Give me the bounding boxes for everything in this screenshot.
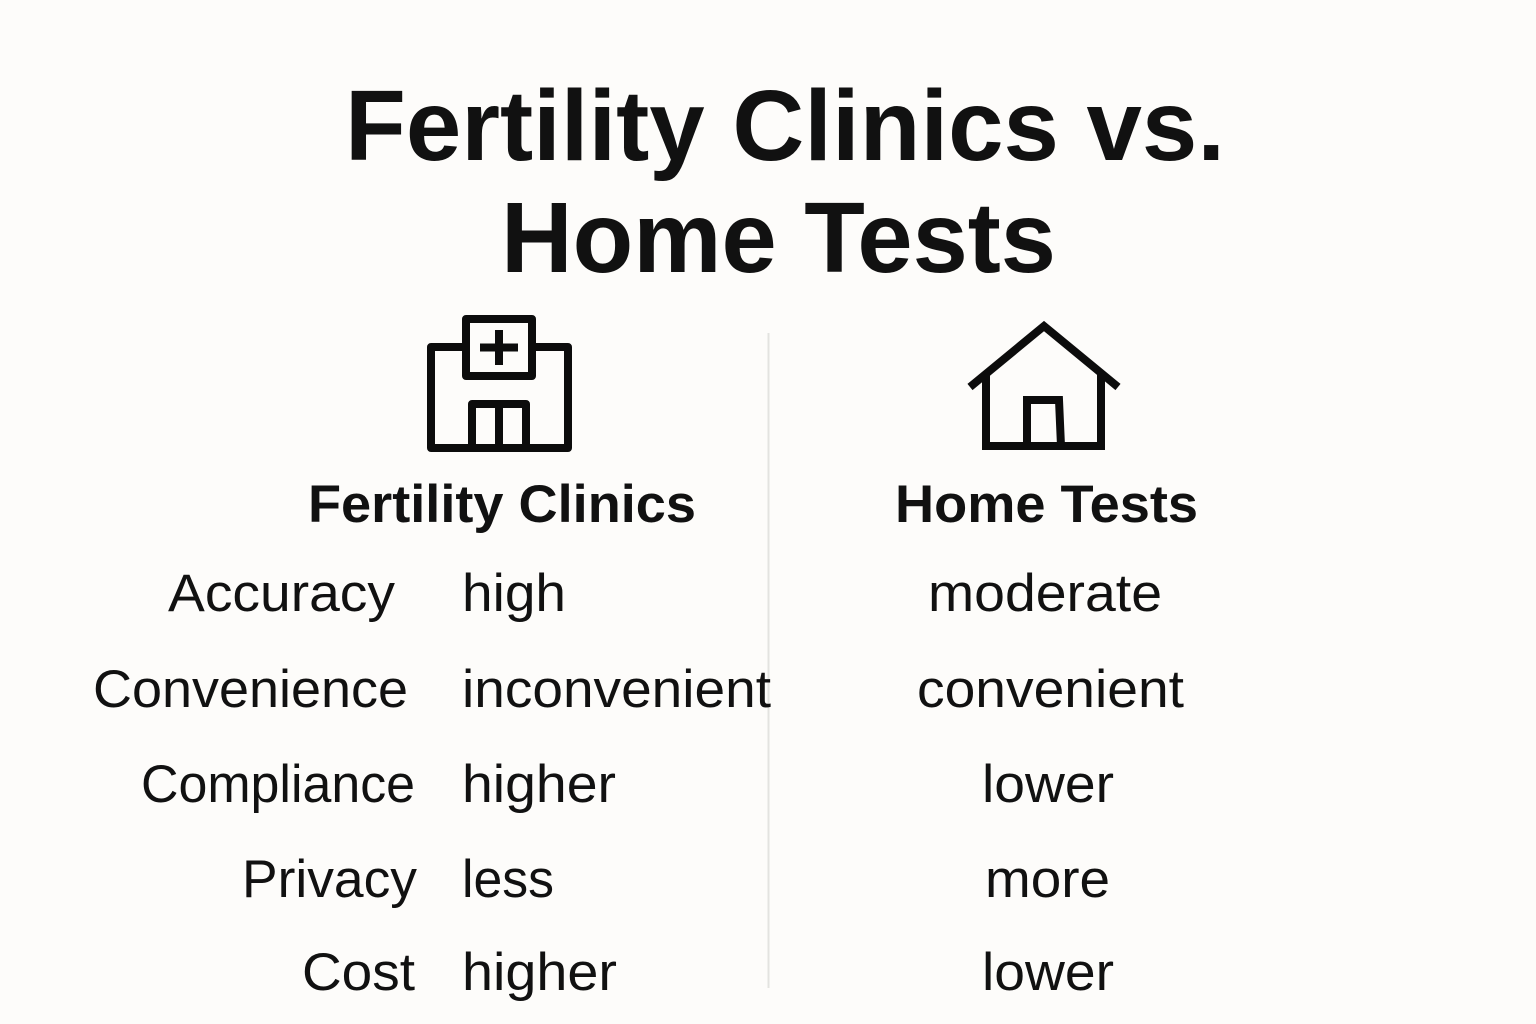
row: convenience: Convenience [93, 660, 408, 719]
heading: fertility clinics: Fertility Clinics [308, 475, 696, 534]
icon: clinic building [431, 319, 568, 448]
row: convenience: convenient [917, 660, 1184, 719]
row: cost [302, 943, 1114, 1002]
row: accuracy: moderate [928, 564, 1162, 623]
row: compliance: lower [982, 755, 1114, 814]
row: accuracy: high [462, 564, 566, 623]
row: privacy: more [985, 850, 1110, 909]
row: convenience [93, 660, 1184, 719]
divider [768, 333, 770, 988]
row: cost: lower [982, 943, 1114, 1002]
row: cost: Cost [302, 943, 415, 1002]
icon: house [970, 326, 1118, 446]
row: convenience: inconvenient [462, 660, 771, 719]
row: accuracy [168, 564, 1162, 623]
title [345, 70, 1225, 294]
title: Fertility Clinics vs. [345, 70, 1225, 182]
row: privacy: Privacy [242, 850, 417, 909]
row: compliance: higher [462, 755, 616, 814]
row: compliance: Compliance [141, 755, 415, 814]
row: privacy [242, 850, 1110, 909]
row: compliance [141, 755, 1114, 814]
row: privacy: less [462, 850, 554, 909]
title: Home Tests [501, 182, 1056, 294]
row: cost: higher [462, 943, 617, 1002]
heading: home tests: Home Tests [895, 475, 1198, 534]
row: accuracy: Accuracy [168, 564, 396, 623]
